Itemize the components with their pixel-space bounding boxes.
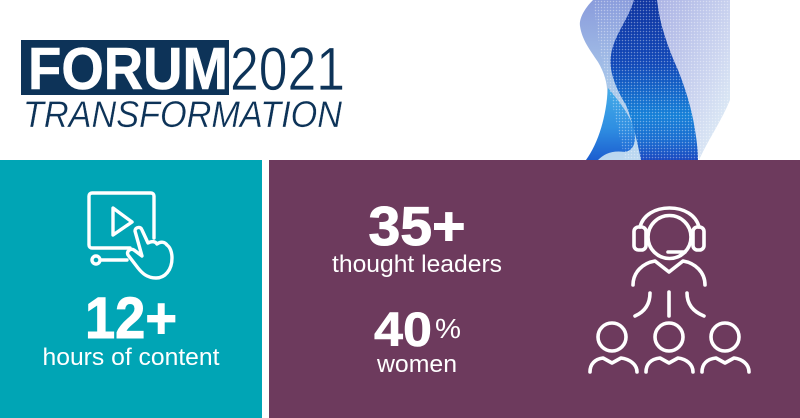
logo word: FORUM: FORUM [28, 36, 228, 102]
logo subtitle: Transformation: TRANSFORMATION [23, 94, 342, 135]
panel background teal [0, 160, 262, 418]
audience person center [646, 323, 693, 372]
panel: hours of content [0, 160, 262, 418]
audience person left [590, 323, 637, 372]
pointing hand [128, 227, 172, 278]
logo: Forum 2021 Transformation [21, 35, 345, 135]
ribbon dot overlay [593, 0, 730, 160]
ribbon cyan lobe [586, 88, 635, 160]
ribbon left mesh [580, 0, 650, 160]
connector lines [635, 292, 704, 316]
audience person right [702, 323, 749, 372]
icon: video play with hand [89, 193, 172, 278]
leader head and headset [634, 208, 704, 258]
timeline [92, 256, 100, 264]
logo navy box [21, 40, 229, 95]
panel background purple [269, 160, 800, 418]
ribbon right mesh [656, 0, 730, 160]
play triangle [113, 208, 132, 235]
decorative blue wave ribbon [580, 0, 730, 160]
stat: 40% [374, 304, 461, 357]
stat: 35+: 35+ [368, 195, 466, 257]
panel: speakers [269, 160, 800, 418]
percent sign: % [435, 313, 461, 344]
logo year: 2021: 2021 [230, 35, 345, 103]
screen frame [89, 193, 154, 248]
stat: 40%: 40 [374, 304, 432, 357]
leader shoulders [633, 261, 705, 285]
label: women: women [376, 351, 457, 378]
label: hours of content: hours of content [42, 344, 220, 371]
icon: leader with headset and three people [590, 208, 749, 372]
stat: 12+: 12+ [85, 286, 177, 351]
ribbon dark band [610, 0, 698, 160]
label: thought leaders: thought leaders [332, 251, 502, 278]
